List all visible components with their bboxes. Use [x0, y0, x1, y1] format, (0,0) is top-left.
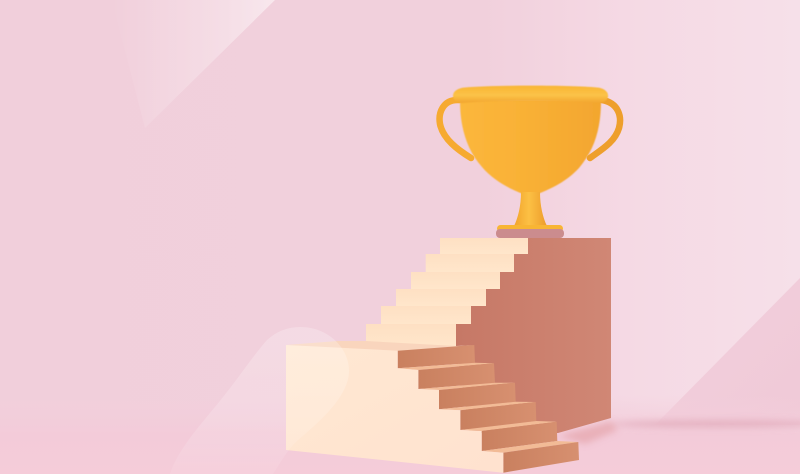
right block side face — [456, 238, 611, 433]
trophy left handle — [440, 100, 471, 158]
trophy cup bowl — [460, 100, 601, 194]
glare: right lower triangle — [655, 278, 800, 425]
floor shadow: beside the block — [558, 421, 618, 444]
trophy right handle — [590, 100, 620, 158]
lower stairs risers — [398, 345, 579, 473]
lower block front face — [286, 345, 503, 473]
trophy rim — [453, 86, 608, 103]
light beam with rounded head — [170, 327, 349, 474]
trophy — [440, 86, 620, 238]
floor shadow: right horizon — [610, 420, 800, 428]
glare: top left diagonal light — [112, 0, 275, 128]
trophy pedestal — [496, 229, 564, 238]
trophy base plate — [497, 225, 563, 232]
lower block top surface — [286, 341, 474, 351]
floor — [0, 395, 800, 474]
upper stairs — [366, 238, 528, 347]
trophy stem — [514, 192, 547, 226]
